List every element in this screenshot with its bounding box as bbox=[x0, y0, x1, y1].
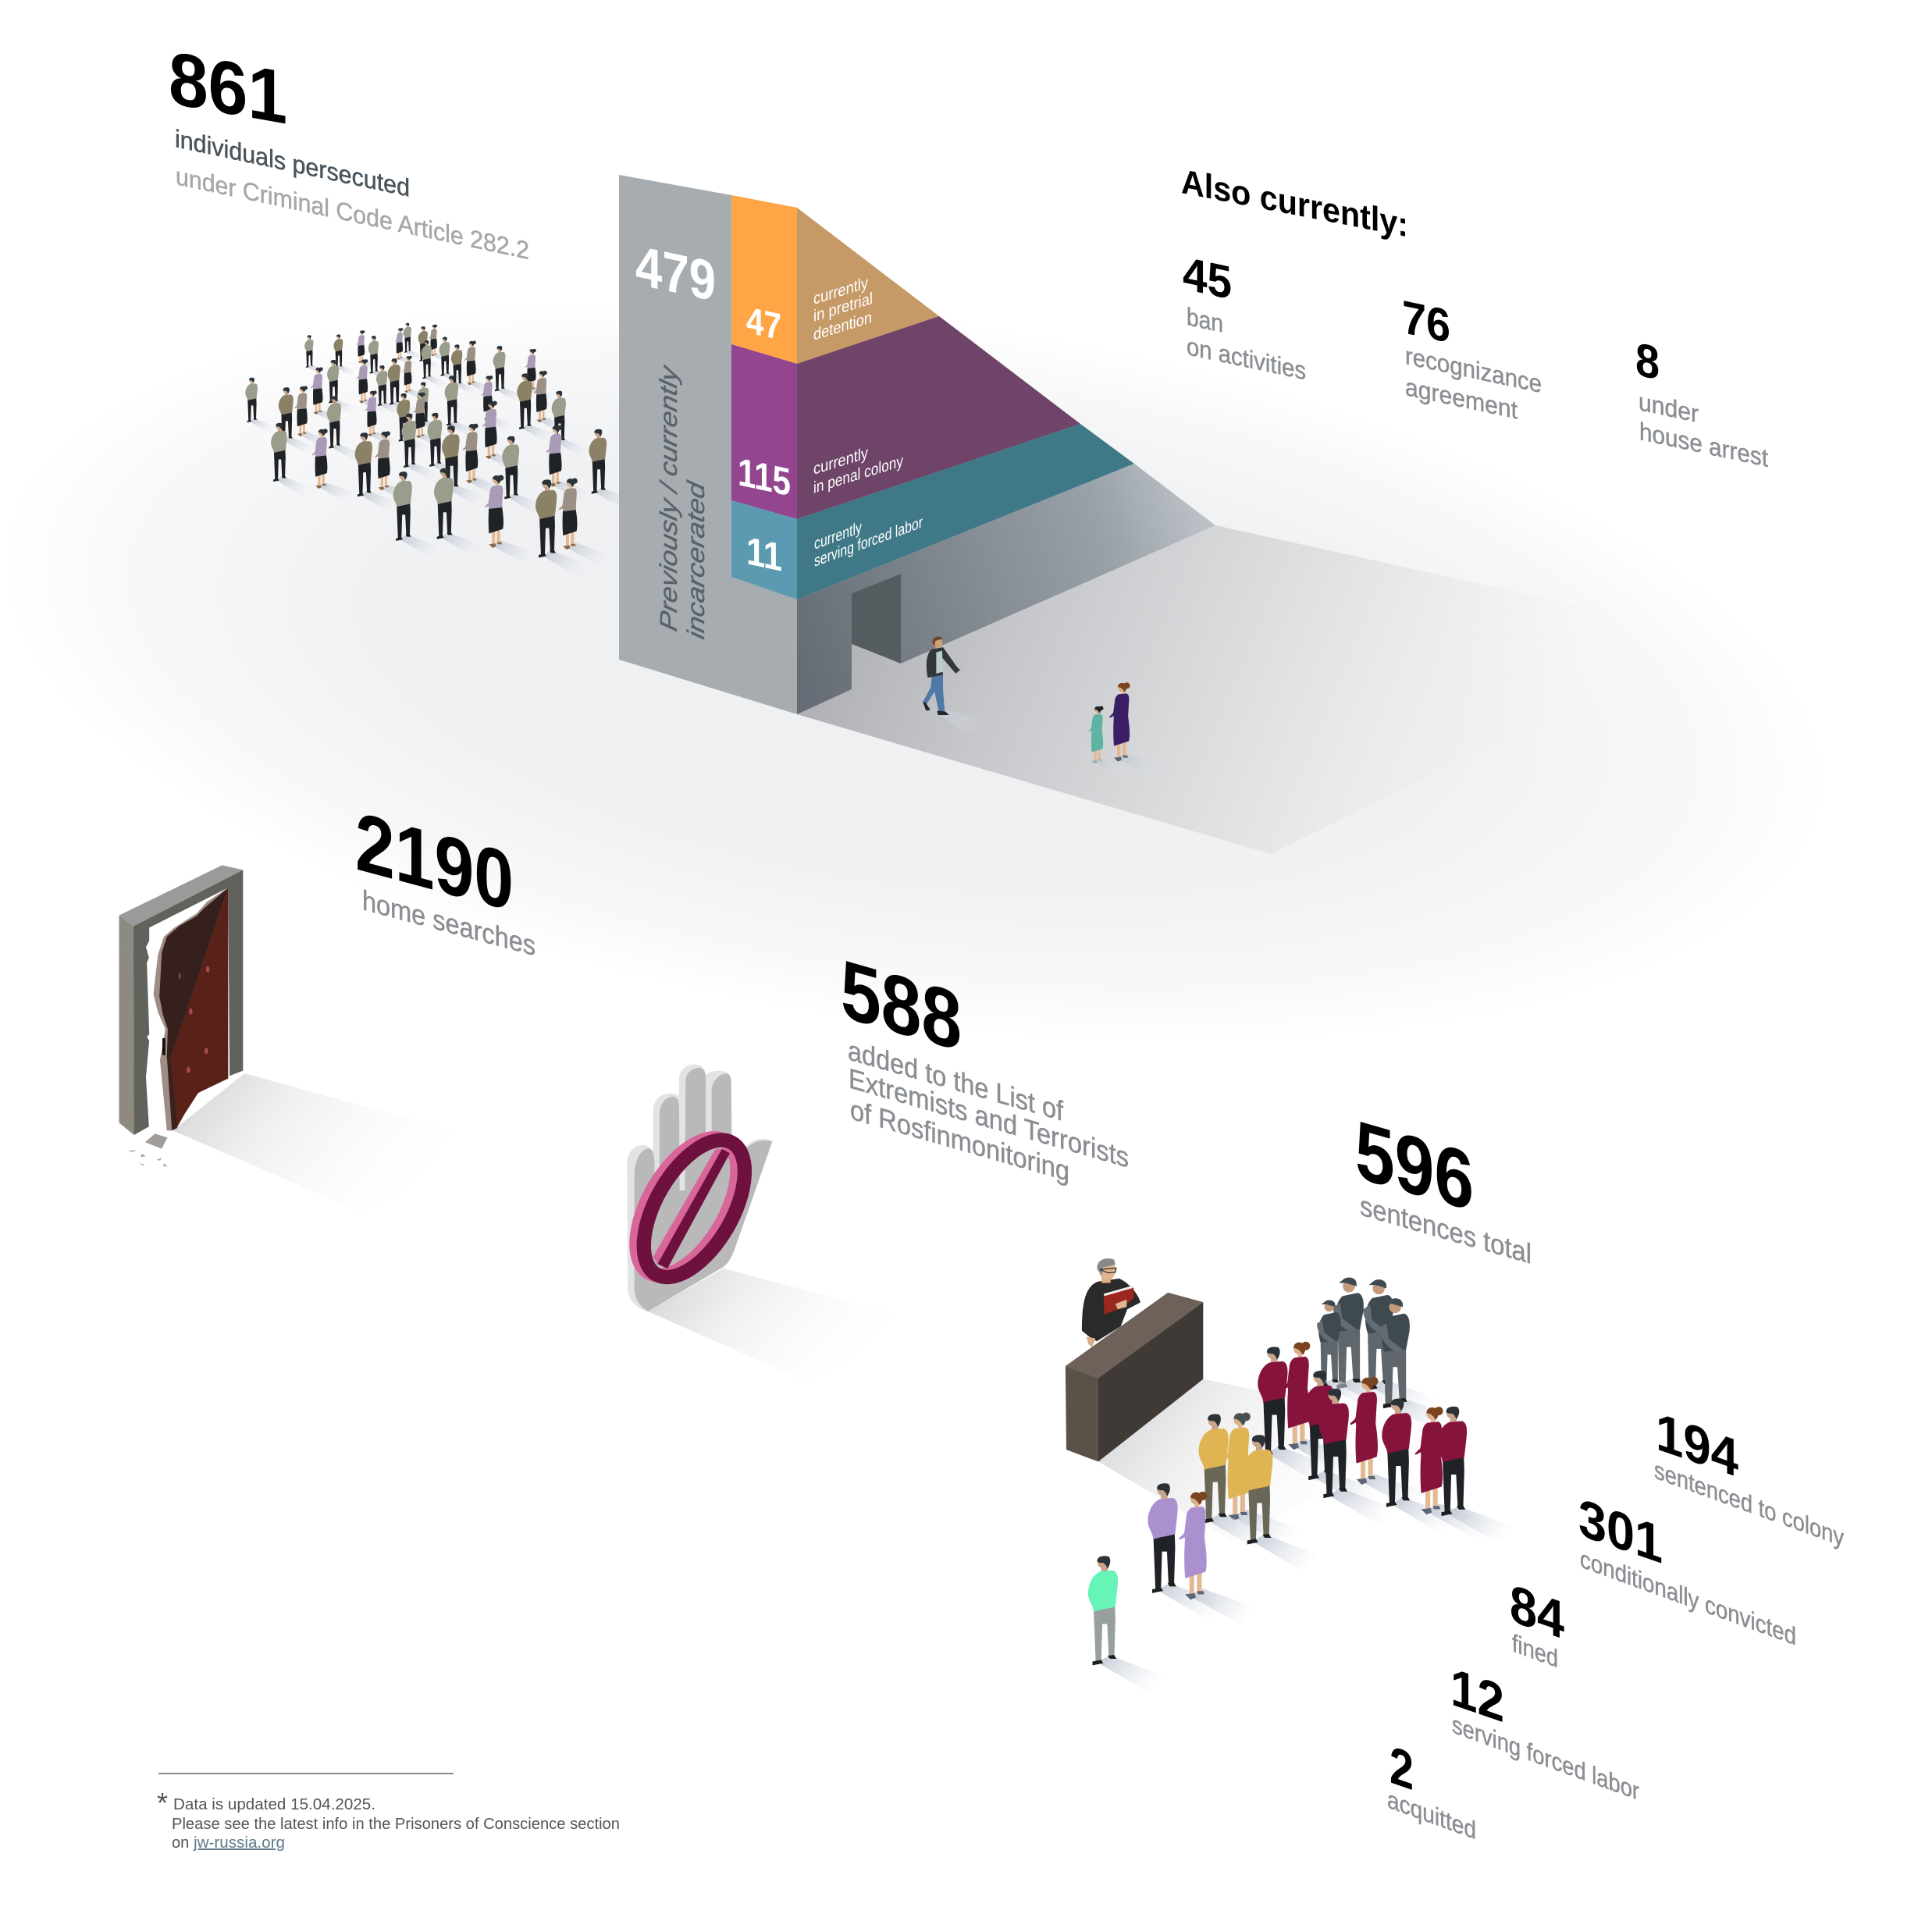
footnote: on bbox=[172, 1834, 189, 1852]
crowd of persecuted individuals bbox=[245, 323, 638, 576]
purple segment front bbox=[731, 344, 797, 519]
pretrial detention label: in pretrial bbox=[813, 289, 873, 326]
orange segment front bbox=[731, 195, 797, 364]
left wall panel: previously or currently incarcerated bbox=[619, 175, 797, 714]
stat 194 sentenced to colony bbox=[1654, 1401, 1844, 1553]
forced labor label: serving forced labor bbox=[814, 512, 923, 571]
icon: broken door bbox=[119, 865, 494, 1212]
stat 8 under house arrest bbox=[1635, 333, 1768, 472]
background ground glow bbox=[0, 195, 1874, 1147]
stat 8 under house arrest: under bbox=[1639, 387, 1699, 428]
stat 596 sentences total bbox=[1355, 1102, 1532, 1270]
stat 84 fined: 84 bbox=[1510, 1573, 1564, 1651]
number 115: 115 bbox=[738, 450, 791, 504]
stat 194 sentenced to colony: sentenced to colony bbox=[1654, 1456, 1844, 1553]
floor in front of the building bbox=[797, 525, 1717, 854]
stat 2 acquitted: acquitted bbox=[1387, 1785, 1476, 1845]
stat 596 sentences total: 596 bbox=[1355, 1102, 1474, 1229]
door broken edge bbox=[154, 888, 228, 1130]
vertical label previously / currently incarcerated bbox=[655, 361, 710, 642]
stat 596 sentences total: sentences total bbox=[1360, 1190, 1532, 1270]
frame top bbox=[119, 865, 243, 927]
stat 588 added to the list: 588 bbox=[841, 941, 962, 1069]
stat 8 under house arrest: 8 bbox=[1635, 333, 1660, 390]
blue segment front bbox=[731, 500, 797, 600]
stat 12 serving forced labor: 12 bbox=[1450, 1656, 1504, 1734]
frame front bbox=[133, 870, 243, 1135]
courtroom scene bbox=[1066, 1258, 1520, 1692]
conditionally convicted group bbox=[1199, 1412, 1325, 1571]
door inner dark side bbox=[159, 888, 228, 1058]
acquitted person bbox=[1088, 1556, 1171, 1692]
penal colony label: currently bbox=[813, 443, 868, 479]
forced labor label bbox=[814, 512, 923, 571]
label individuals persecuted: individuals persecuted bbox=[175, 124, 410, 202]
stat 84 fined: fined bbox=[1512, 1629, 1558, 1674]
prohibition sign front bbox=[623, 1124, 765, 1293]
girl in teal dress bbox=[1088, 706, 1133, 777]
title: 861 individuals persecuted bbox=[169, 35, 529, 265]
pretrial detention label: currently bbox=[813, 273, 868, 308]
stat 301 conditionally convicted bbox=[1578, 1487, 1796, 1652]
stat 2 acquitted bbox=[1387, 1735, 1476, 1845]
stat 301 conditionally convicted: 301 bbox=[1578, 1487, 1663, 1575]
stat 12 serving forced labor bbox=[1450, 1656, 1639, 1806]
stat 45 ban on activities: ban bbox=[1187, 302, 1223, 338]
stat 2190 home searches: 2190 bbox=[355, 794, 514, 929]
number 47: 47 bbox=[746, 299, 781, 348]
sentenced to colony group bbox=[1258, 1342, 1520, 1542]
vertical label previously / currently incarcerated: Previously / currently bbox=[655, 361, 682, 634]
stat 8 under house arrest: house arrest bbox=[1639, 417, 1768, 472]
hand light edge bbox=[627, 1064, 772, 1311]
stat 301 conditionally convicted: conditionally convicted bbox=[1580, 1545, 1796, 1652]
also currently block bbox=[1181, 162, 1768, 472]
people at the building doorway bbox=[923, 637, 1171, 780]
footnote bbox=[157, 1773, 620, 1852]
icon: stop hand with prohibition sign bbox=[616, 1064, 927, 1382]
hand floor shadow bbox=[648, 1268, 927, 1382]
stat 76 recognizance agreement bbox=[1402, 290, 1542, 425]
dark purple side segment bbox=[797, 316, 1080, 519]
pretrial detention label: detention bbox=[813, 308, 872, 344]
door lower strip bbox=[167, 1056, 177, 1130]
stat 45 ban on activities bbox=[1183, 247, 1306, 385]
isometric incarceration chart building bbox=[619, 175, 1717, 854]
stat 45 ban on activities: 45 bbox=[1183, 247, 1232, 309]
grey side wall with door opening bbox=[797, 464, 1215, 714]
stat 194 sentenced to colony: 194 bbox=[1656, 1401, 1738, 1489]
stat 2 acquitted: 2 bbox=[1389, 1735, 1414, 1802]
judge bench bbox=[1066, 1293, 1203, 1461]
penal colony label: in penal colony bbox=[813, 451, 903, 497]
stat 76 recognizance agreement: agreement bbox=[1405, 372, 1518, 425]
stat 76 recognizance agreement: recognizance bbox=[1405, 341, 1542, 398]
footnote: jw-russia.org bbox=[193, 1834, 285, 1852]
tan side segment bbox=[797, 208, 939, 364]
guards bbox=[1317, 1277, 1457, 1430]
pretrial detention label bbox=[813, 273, 873, 344]
doorway recess bbox=[852, 574, 901, 664]
walking man bbox=[923, 637, 987, 734]
forced labor label: currently bbox=[814, 517, 862, 553]
footnote: Please see the latest info in the Prisoners of Conscience section bbox=[172, 1816, 620, 1833]
label under Criminal Code Article: under Criminal Code Article 282.2 bbox=[176, 162, 529, 265]
teal side segment bbox=[797, 424, 1134, 600]
footnote: * bbox=[157, 1787, 168, 1819]
stat 588 added to the list: added to the List of bbox=[848, 1034, 1064, 1127]
vertical label previously / currently incarcerated: incarcerated bbox=[682, 478, 710, 642]
stat 12 serving forced labor: serving forced labor bbox=[1452, 1710, 1639, 1806]
stat 76 recognizance agreement: 76 bbox=[1402, 290, 1450, 353]
stat 588 added to the list: of Rosfinmonitoring bbox=[850, 1094, 1069, 1187]
woman in purple dress bbox=[1109, 682, 1171, 780]
number 479: 479 bbox=[635, 234, 716, 314]
stat 2190 home searches: home searches bbox=[362, 884, 536, 962]
number 861: 861 bbox=[169, 35, 287, 141]
prohibition sign pink extrusion bbox=[616, 1122, 758, 1292]
number 11: 11 bbox=[746, 528, 782, 580]
frame left side bbox=[119, 916, 134, 1135]
door floor shadow bbox=[173, 1073, 494, 1212]
debris bbox=[128, 1133, 168, 1166]
fined group bbox=[1148, 1483, 1263, 1624]
stat 588 added to the list bbox=[841, 941, 1129, 1187]
stat 45 ban on activities: on activities bbox=[1187, 332, 1306, 385]
hand face bbox=[635, 1068, 772, 1311]
judge figure bbox=[1082, 1258, 1140, 1347]
door studs bbox=[179, 966, 209, 1073]
lock bbox=[162, 1038, 165, 1055]
heading also currently: Also currently: bbox=[1181, 162, 1408, 244]
door face bbox=[171, 888, 228, 1128]
courtroom floor shadow bbox=[1098, 1379, 1450, 1540]
stat 588 added to the list: Extremists and Terrorists bbox=[849, 1062, 1129, 1174]
footnote: Data is updated 15.04.2025. bbox=[173, 1796, 375, 1813]
